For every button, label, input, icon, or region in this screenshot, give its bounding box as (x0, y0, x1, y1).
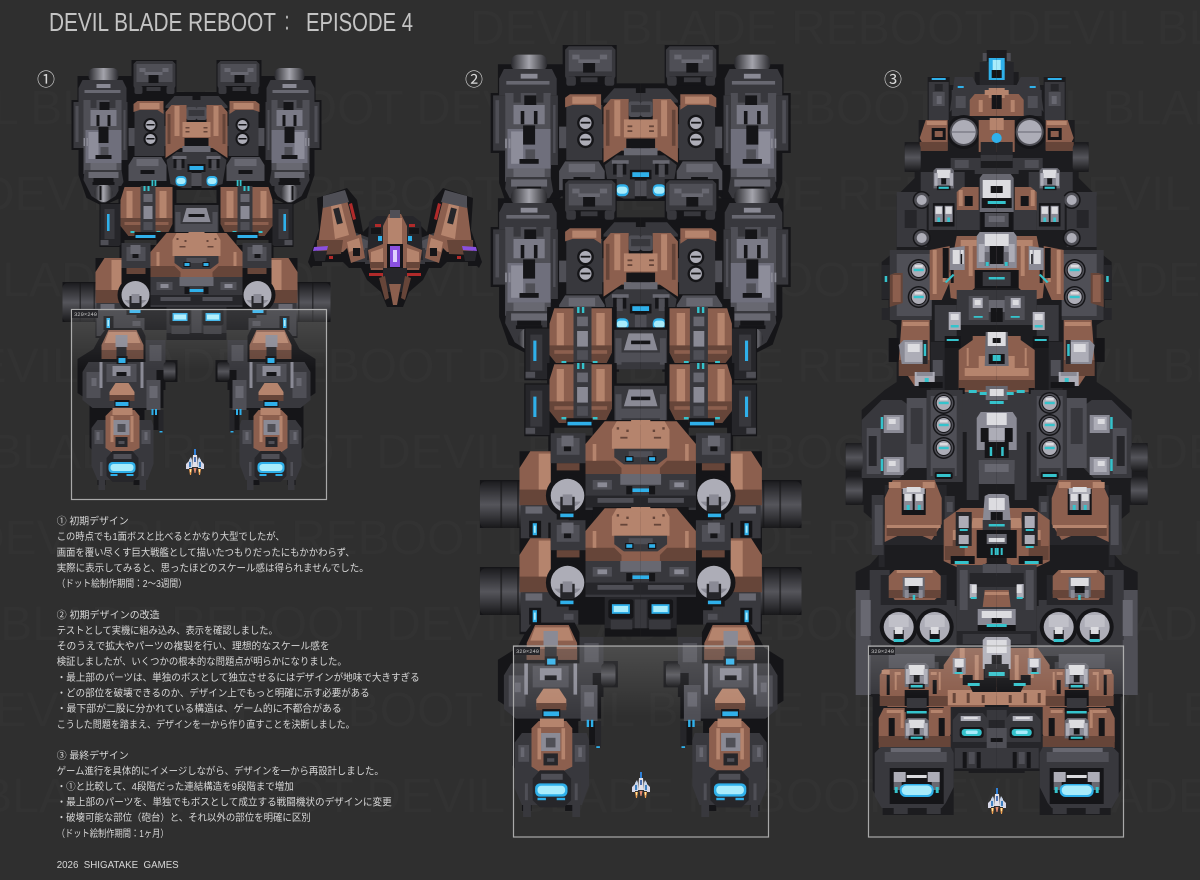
section 2 notes: 検証しましたが、いくつかの根本的な問題点が明らかになりました。 (57, 655, 347, 668)
section 2 notes: ・最下部が二股に分かれている構造は、ゲーム的に不都合がある (57, 702, 342, 715)
section 3 notes: ・破壊可能な部位（砲台）と、それ以外の部位を明確に区別 (57, 811, 311, 824)
twin legs (498, 623, 784, 817)
section 2 notes: ・どの部位を破壊できるのか、デザイン上でもっと明確に示す必要がある (57, 686, 370, 700)
text block: design notes (57, 514, 420, 871)
upper section of boss 1 (72, 60, 322, 206)
section 1 notes (57, 514, 369, 590)
label: number 2: ② (465, 66, 483, 92)
title: ： (281, 11, 293, 36)
player ship in design 1 (186, 449, 204, 475)
section 1 notes: 画面を覆い尽くす巨大戦艦として描いたつもりだったにもかかわらず、 (57, 546, 355, 559)
small fighter boss (308, 188, 482, 307)
section 2 notes: こうした問題を踏まえ、デザインを一から作り直すことを決断しました。 (57, 718, 355, 731)
middle section of boss 1 (100, 186, 294, 247)
credit: 2026 SHIGATAKE GAMES (57, 860, 179, 871)
screen frame 320x240 design 3: 320×240 (871, 648, 894, 655)
section 1 notes: ① 初期デザイン (57, 514, 129, 528)
boss design 2: modified initial design (480, 45, 802, 817)
boss design 1: initial design (62, 60, 330, 490)
section 2 notes (57, 608, 420, 731)
section 3 notes: ・最上部のパーツを、単独でもボスとして成立する戦闘機状のデザインに変更 (57, 796, 392, 808)
screen frame 320x240 design 2 (514, 646, 768, 837)
section 2 notes: テストとして実機に組み込み、表示を確認しました。 (57, 624, 278, 637)
title: EPISODE 4 (306, 7, 413, 37)
middle section repeat 2 (524, 363, 757, 436)
section 2 notes: ・最上部のパーツは、単独のボスとして独立させるにはデザインが地味で大きすぎる (57, 671, 420, 684)
section 3 notes: ゲーム進行を具体的にイメージしながら、デザインを一から再設計しました。 (57, 764, 384, 778)
screen frame 320x240 design 1 (72, 310, 326, 500)
lower section of boss 1 (62, 232, 330, 340)
boss design 3: final design (846, 50, 1148, 815)
section 2 notes: そのうえで拡大やパーツの複製を行い、理想的なスケール感を (57, 640, 330, 652)
twin legs of boss 1 (78, 328, 316, 490)
lower section repeat 2 (480, 507, 802, 637)
section 1 notes: （ドット絵制作期間：2～3週間） (57, 577, 187, 590)
screen frame 320x240 design 2: 320×240 (516, 648, 539, 655)
middle section repeat 1 (524, 307, 757, 380)
section 3 notes (57, 749, 392, 840)
upper section repeat 1 (491, 45, 791, 220)
title: DEVIL BLADE REBOOT (49, 7, 276, 37)
player ship in design 2 (632, 772, 650, 798)
section 3 notes: ・①と比較して、4段階だった連結構造を9段階まで増加 (57, 780, 294, 793)
section 1 notes: 実際に表示してみると、思ったほどのスケール感は得られませんでした。 (57, 562, 369, 574)
section 3 notes: ③ 最終デザイン (57, 749, 129, 762)
screen frame 320x240 design 3 (868, 646, 1124, 837)
label: number 3: ③ (884, 66, 902, 92)
lower section repeat 1 (480, 420, 802, 550)
player ship in design 3 (988, 788, 1006, 814)
section 3 notes: （ドット絵制作期間：1ヶ月） (57, 827, 169, 840)
label: number 1: ① (37, 66, 55, 92)
section 2 notes: ② 初期デザインの改造 (57, 608, 160, 622)
upper section repeat 2 (491, 179, 791, 354)
section 1 notes: この時点でも1面ボスと比べるとかなり大型でしたが、 (57, 530, 285, 543)
screen frame 320x240 design 1: 320×240 (74, 311, 97, 318)
